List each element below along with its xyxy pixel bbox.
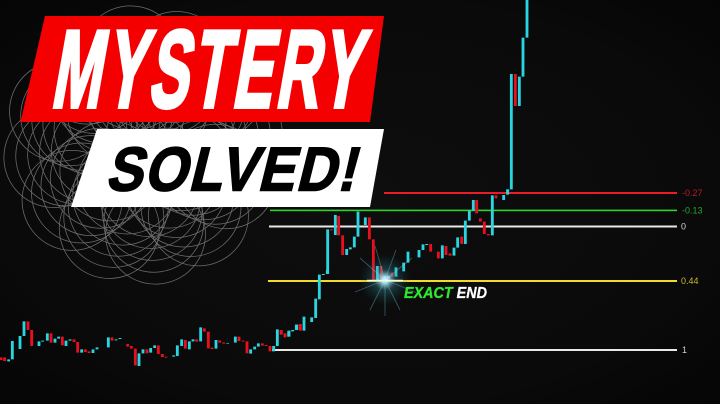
candlesticks: first rally: [281, 270, 327, 337]
spirograph circle pattern: [0, 0, 292, 294]
level label -0.13: -0.13: [682, 206, 703, 216]
level label 0.44: 0.44: [681, 276, 699, 286]
level label 1: 1: [682, 345, 687, 355]
candlesticks: breakout section: [508, 0, 527, 195]
title banner: MYSTERY: MYSTERY: [46, 7, 380, 130]
level label -0.27: -0.27: [682, 188, 703, 198]
level line: -0.13 green: [270, 210, 677, 211]
candlesticks: middle section: [328, 189, 508, 280]
starburst flare: [355, 246, 420, 316]
callout: EXACT END: EXACT END: [404, 285, 487, 302]
candlesticks: left sideways section: [1, 321, 300, 366]
level line: 0 white: [269, 226, 677, 228]
level line: -0.27 red: [384, 192, 677, 194]
level line: 0.44 yellow: [268, 280, 677, 282]
level label 0: 0: [681, 222, 686, 232]
title banner: SOLVED!: SOLVED!: [102, 134, 370, 204]
level line: 1 white: [272, 349, 677, 351]
